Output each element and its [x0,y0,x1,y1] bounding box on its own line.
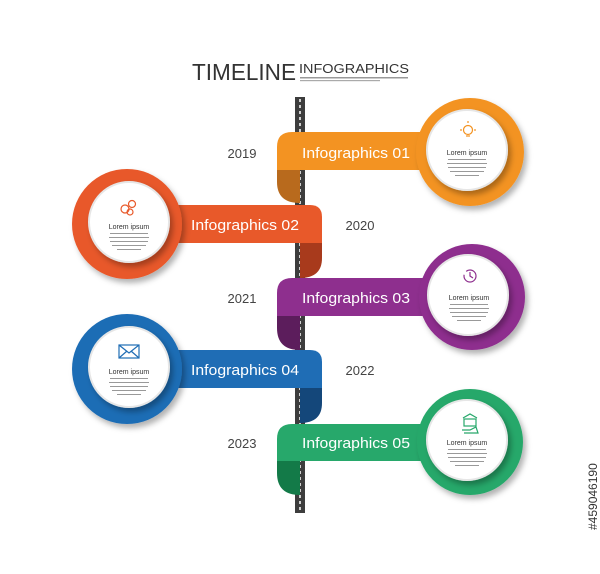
item 02: Infographics 02 [191,217,299,234]
item 05 [277,389,523,495]
year 2019: 2019 [228,146,256,161]
year 2022: 2022 [346,363,374,378]
title [192,59,409,85]
title: INFOGRAPHICS [299,62,409,76]
year 2023: 2023 [228,436,256,451]
item 01: Lorem ipsum [447,150,487,157]
icon: envelope [119,345,139,358]
item 01: Infographics 01 [302,145,410,162]
item 04 [72,314,322,424]
icon: hand money [462,414,478,433]
item 03: Lorem ipsum [449,295,489,302]
item 03: Infographics 03 [302,290,410,307]
item 02 [72,169,322,279]
icon: clock [464,270,476,282]
item 05: Lorem ipsum [447,440,487,447]
side watermark id: #459046190 [586,463,600,530]
title: TIMELINE [192,59,296,85]
icon: gears [121,200,136,215]
item 04: Infographics 04 [191,362,299,379]
item 05: Infographics 05 [302,435,410,452]
road [295,97,305,513]
year 2021: 2021 [228,291,256,306]
icon: bulb [460,121,476,136]
item 02: Lorem ipsum [109,224,149,231]
item 04: Lorem ipsum [109,369,149,376]
year 2020: 2020 [346,218,374,233]
item 01 [277,98,524,206]
item 03 [277,244,525,350]
